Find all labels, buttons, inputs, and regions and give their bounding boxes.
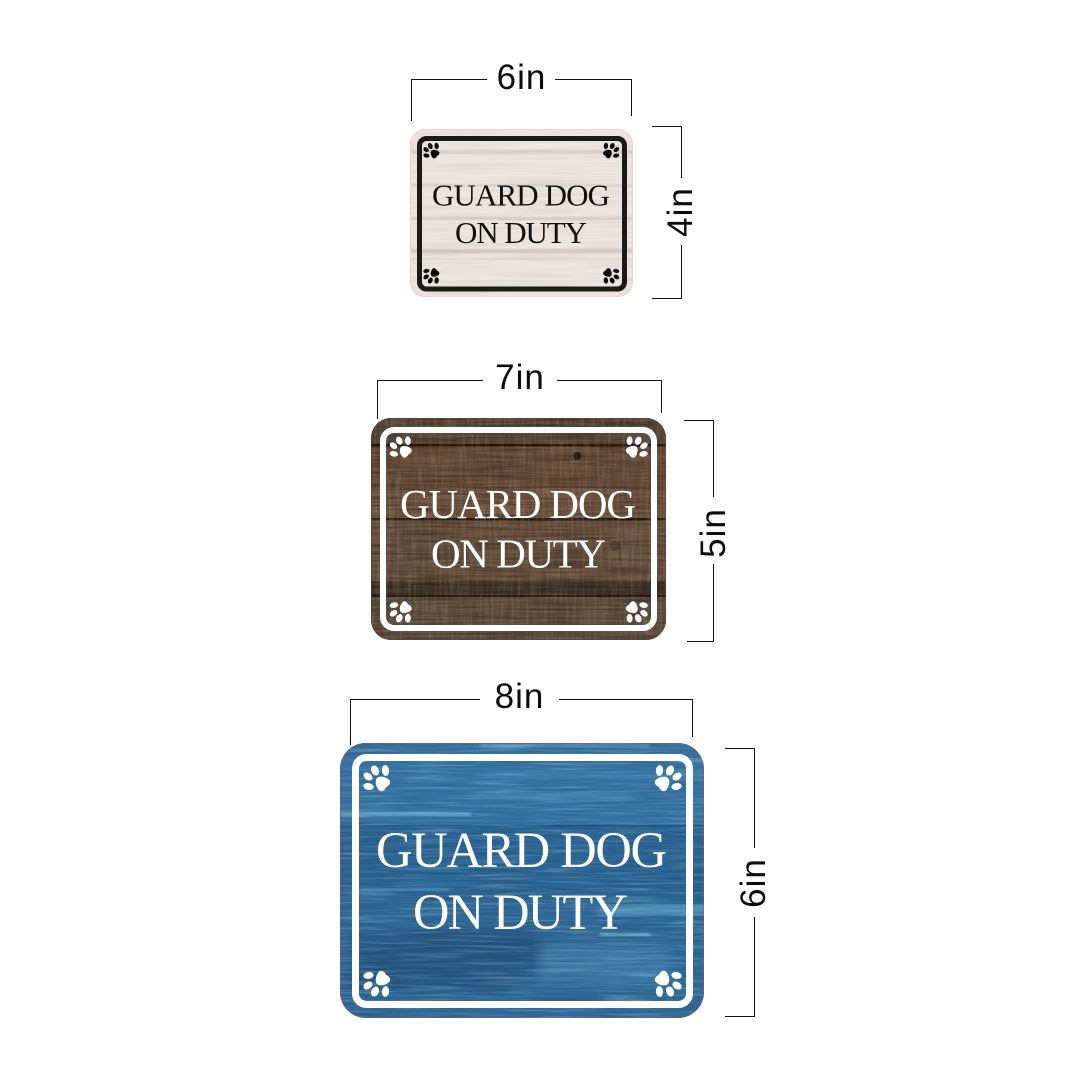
width dimension: 8in: 8in xyxy=(495,677,544,716)
sign text xyxy=(376,822,667,940)
height dimension: 6in xyxy=(725,748,773,1016)
sign text: ON DUTY xyxy=(413,884,628,940)
medium sign 7in x 5in xyxy=(371,418,666,640)
height dimension: 4in: 4in xyxy=(661,187,700,237)
sign text: GUARD DOG xyxy=(400,481,636,527)
width dimension: 7in xyxy=(378,358,662,419)
small sign 6in x 4in xyxy=(400,129,643,297)
height dimension: 5in: 5in xyxy=(694,508,733,558)
sign text: GUARD DOG xyxy=(376,822,667,878)
sign text: GUARD DOG xyxy=(432,178,610,212)
paw icons xyxy=(389,436,649,623)
width dimension: 8in xyxy=(350,677,692,745)
paw icons xyxy=(422,142,620,284)
sign text xyxy=(400,481,636,576)
width dimension: 6in xyxy=(412,58,632,121)
width dimension: 7in: 7in xyxy=(495,358,545,397)
paw icons xyxy=(362,764,683,998)
width dimension: 6in: 6in xyxy=(497,58,546,97)
height dimension: 4in xyxy=(652,126,700,298)
sign border xyxy=(383,430,654,628)
sign border xyxy=(420,138,624,289)
large sign 8in x 6in xyxy=(320,743,724,1018)
sign border xyxy=(356,758,690,1004)
height dimension: 5in xyxy=(684,420,733,642)
sign text: ON DUTY xyxy=(431,530,606,576)
sign text xyxy=(432,178,610,250)
sign text: ON DUTY xyxy=(455,215,587,250)
height dimension: 6in: 6in xyxy=(734,858,773,908)
